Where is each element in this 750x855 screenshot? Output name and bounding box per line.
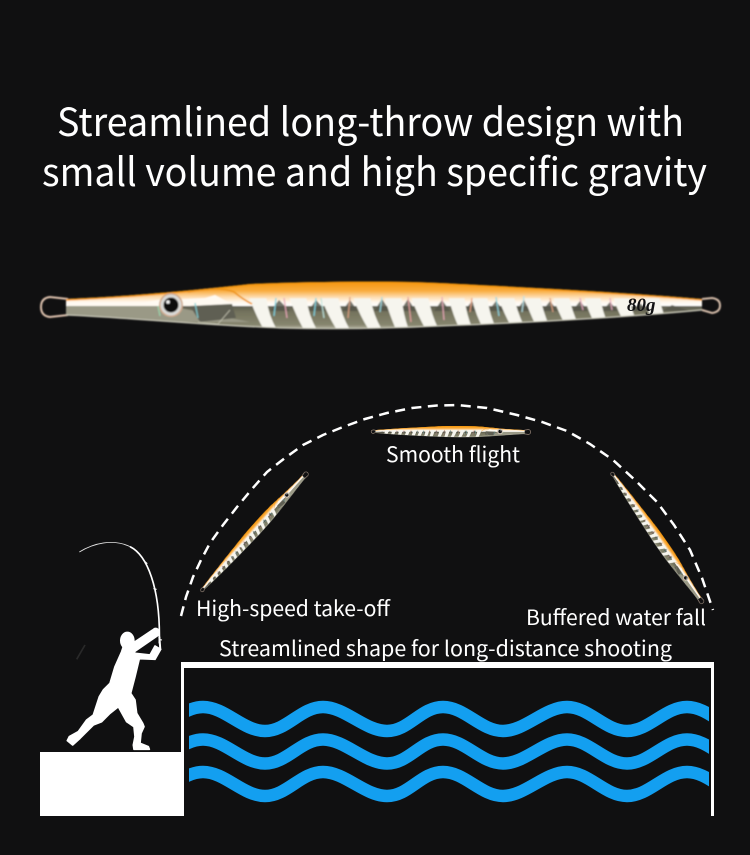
white platform <box>40 752 184 816</box>
title <box>42 92 707 198</box>
title: Streamlined long-throw design with <box>57 92 684 148</box>
large lure with 80g mark <box>41 278 720 332</box>
small lure: take-off <box>196 468 312 596</box>
wave: top <box>143 707 747 731</box>
label: smooth flight: Smooth flight <box>386 439 520 469</box>
small lure: flight <box>371 425 531 438</box>
label: buffered water fall: Buffered water fall <box>526 602 706 632</box>
title: small volume and high specific gravity <box>42 142 707 198</box>
large lure with 80g mark: 80g <box>627 295 656 316</box>
icon: fisherman silhouette with rod <box>67 542 162 749</box>
water waves <box>143 707 747 796</box>
dashed flight arc <box>181 405 713 616</box>
wave: middle <box>143 740 747 764</box>
water frame <box>182 665 712 816</box>
wave: bottom <box>143 772 747 796</box>
small lure: water fall <box>606 469 708 607</box>
label: high-speed take-off: High-speed take-off <box>196 593 391 623</box>
label: streamlined shape: Streamlined shape for long-distance shooting <box>219 633 672 663</box>
